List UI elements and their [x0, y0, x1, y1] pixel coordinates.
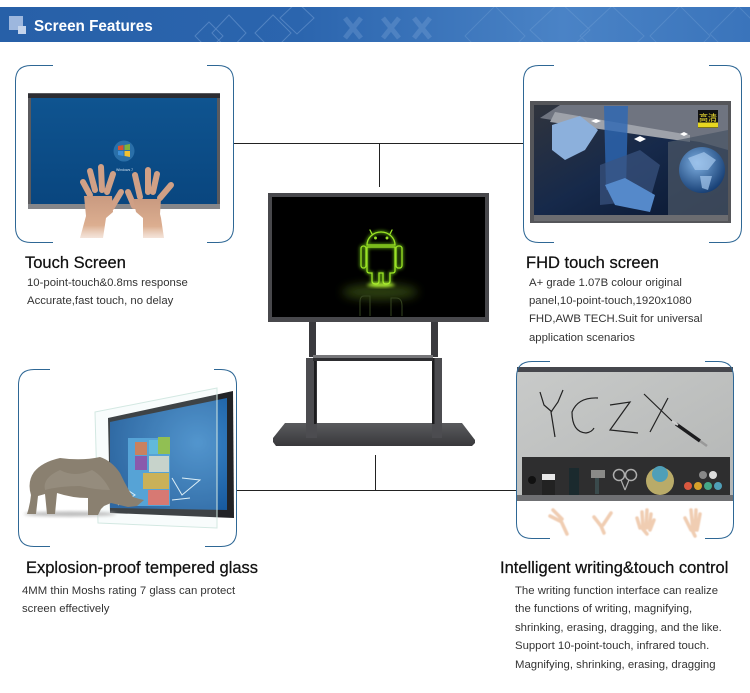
icon: header squares [9, 16, 26, 34]
heading: Explosion-proof tempered glass [26, 559, 258, 577]
monitor: FHD image: 高清 [699, 112, 717, 123]
connector: bottom [236, 455, 516, 490]
description [529, 277, 702, 344]
icons: touch gestures [550, 510, 700, 536]
icon: Windows logo [114, 140, 134, 162]
icon: neon android [342, 230, 418, 316]
connector: top [233, 143, 523, 187]
panel: explosion-proof glass [18, 370, 236, 546]
description: 4MM thin Moshs rating 7 glass can protect [22, 585, 236, 597]
central product: monitor on stand [268, 193, 489, 446]
monitor: Windows 7 [28, 93, 220, 209]
text: explosion-proof glass [22, 559, 258, 615]
panel frame [516, 362, 734, 538]
description [27, 277, 188, 307]
monitor [268, 193, 489, 322]
icon: left hand [80, 167, 121, 238]
glass pane [95, 388, 217, 528]
monitor: Windows 7: Windows 7 [116, 168, 133, 172]
heading: Screen Features: Screen Features [34, 18, 153, 35]
description: Accurate,fast touch, no delay [27, 295, 174, 307]
icon: rhino [24, 457, 144, 516]
globe [679, 147, 725, 193]
description: The writing function interface can realize [515, 585, 718, 597]
description [22, 585, 236, 615]
heading: FHD touch screen [526, 254, 659, 272]
monitor: FHD image [530, 101, 731, 223]
panel frame [16, 66, 234, 242]
description: panel,10-point-touch,1920x1080 [529, 295, 692, 307]
icon: right hand [128, 170, 171, 238]
badge: HD [698, 110, 718, 128]
description: shrinking, erasing, dragging, and the like. [515, 622, 722, 634]
icon: stylus [672, 421, 707, 446]
text: touch screen [25, 254, 188, 307]
description: Magnifying, shrinking, erasing, dragging [515, 659, 716, 671]
text: intelligent writing [500, 559, 728, 671]
panel: FHD touch screen [524, 66, 742, 242]
description: the functions of writing, magnifying, [515, 603, 692, 615]
description [515, 585, 722, 671]
handwriting: YCZX [540, 390, 672, 437]
panel: intelligent writing [516, 362, 734, 538]
stand [273, 322, 475, 446]
description: Support 10-point-touch, infrared touch. [515, 640, 709, 652]
toolbar [522, 457, 730, 495]
monitor: whiteboard [517, 367, 733, 501]
header banner [0, 7, 750, 42]
panel frame [18, 370, 236, 546]
panel: touch screen [16, 66, 234, 242]
description: FHD,AWB TECH.Suit for universal [529, 313, 702, 325]
text: FHD touch screen [526, 254, 702, 344]
panel frame [524, 66, 742, 242]
description: 10-point-touch&0.8ms response [27, 277, 188, 289]
heading: Touch Screen [25, 254, 126, 272]
monitor: Windows 10 [95, 388, 234, 528]
description: screen effectively [22, 603, 110, 615]
description: application scenarios [529, 332, 635, 344]
description: A+ grade 1.07B colour original [529, 277, 682, 289]
heading: Intelligent writing&touch control [500, 559, 728, 577]
cracks [118, 478, 200, 505]
